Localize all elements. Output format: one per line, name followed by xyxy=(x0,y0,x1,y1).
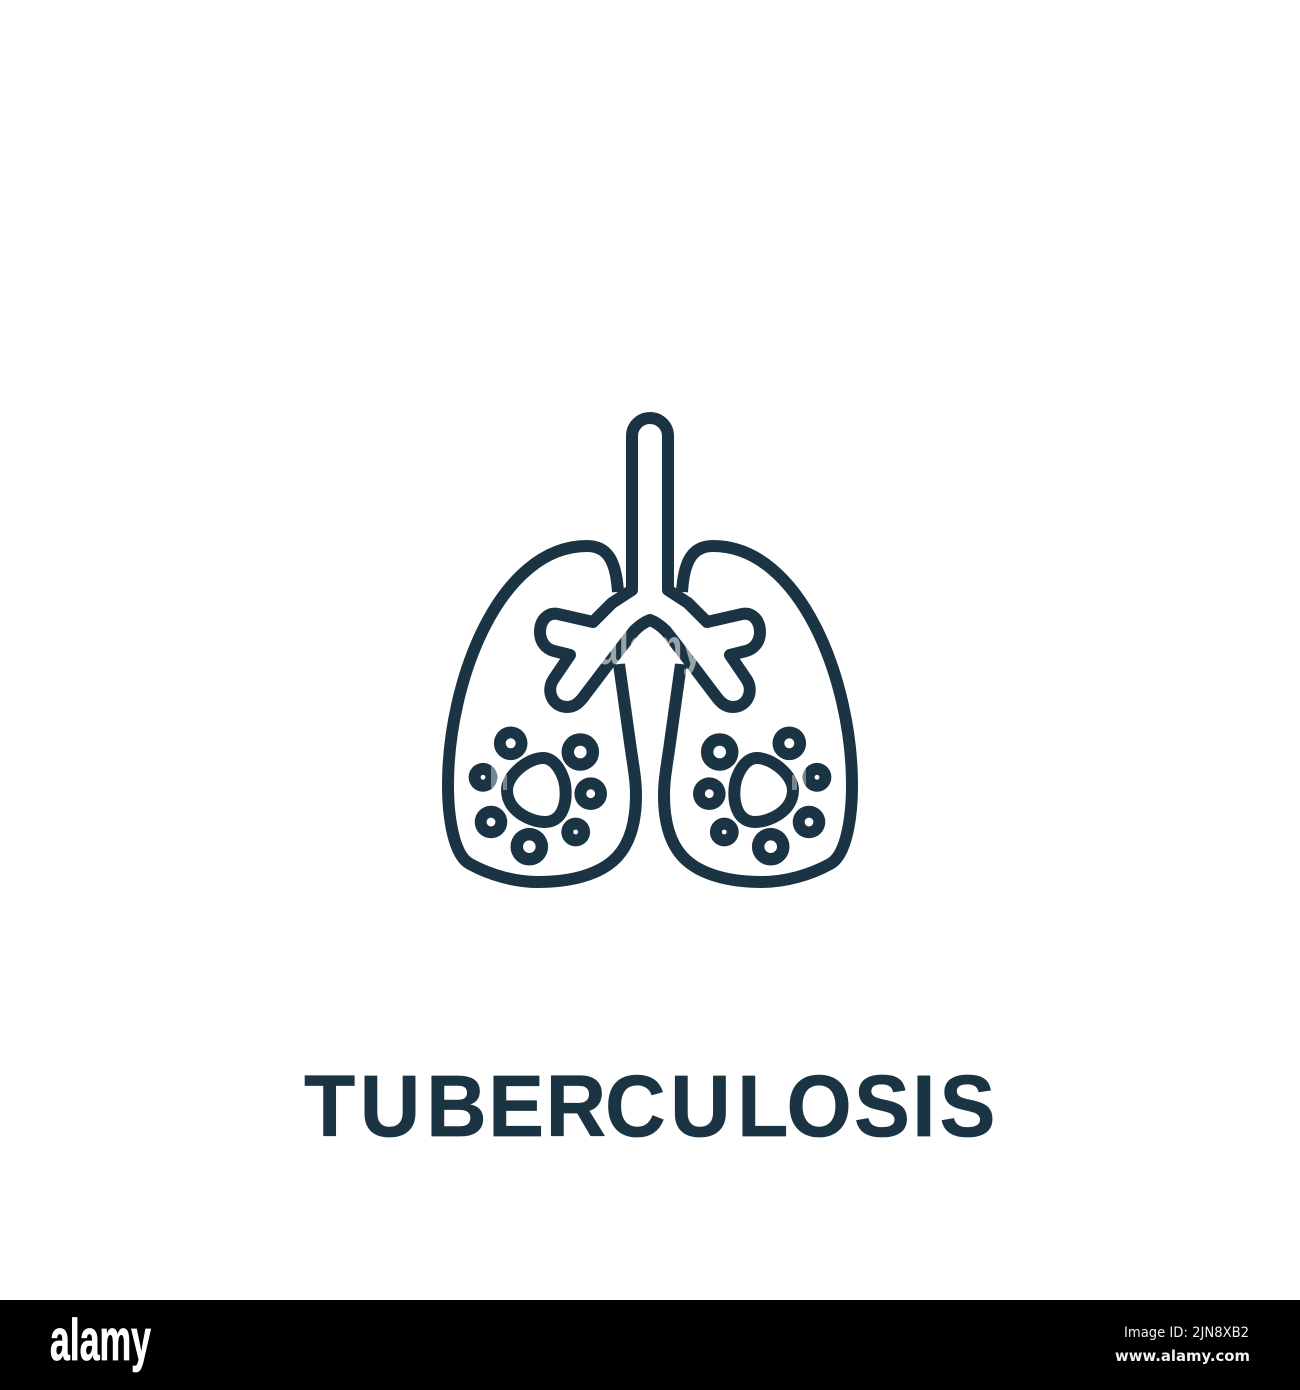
left lung xyxy=(448,546,636,882)
image id: Image ID: 2JN8XB2 xyxy=(1124,1325,1249,1341)
left lung outline xyxy=(448,546,636,882)
website: www.alamy.com xyxy=(1115,1347,1250,1365)
right lung central lesion xyxy=(734,758,793,822)
footer logo: alamy xyxy=(50,1308,151,1373)
watermark: alamy xyxy=(598,619,703,675)
title: TUBERCULOSIS xyxy=(304,1058,995,1155)
right lung outline xyxy=(664,546,852,882)
right lung nodules xyxy=(693,726,831,866)
left lung central lesion xyxy=(507,758,566,822)
icon: lungs with tuberculosis lesions xyxy=(448,418,852,882)
watermark xyxy=(491,619,806,790)
right lung xyxy=(664,546,852,882)
trachea and bronchi xyxy=(540,418,760,707)
left lung nodules xyxy=(469,726,607,866)
footer bar xyxy=(0,1300,1300,1390)
